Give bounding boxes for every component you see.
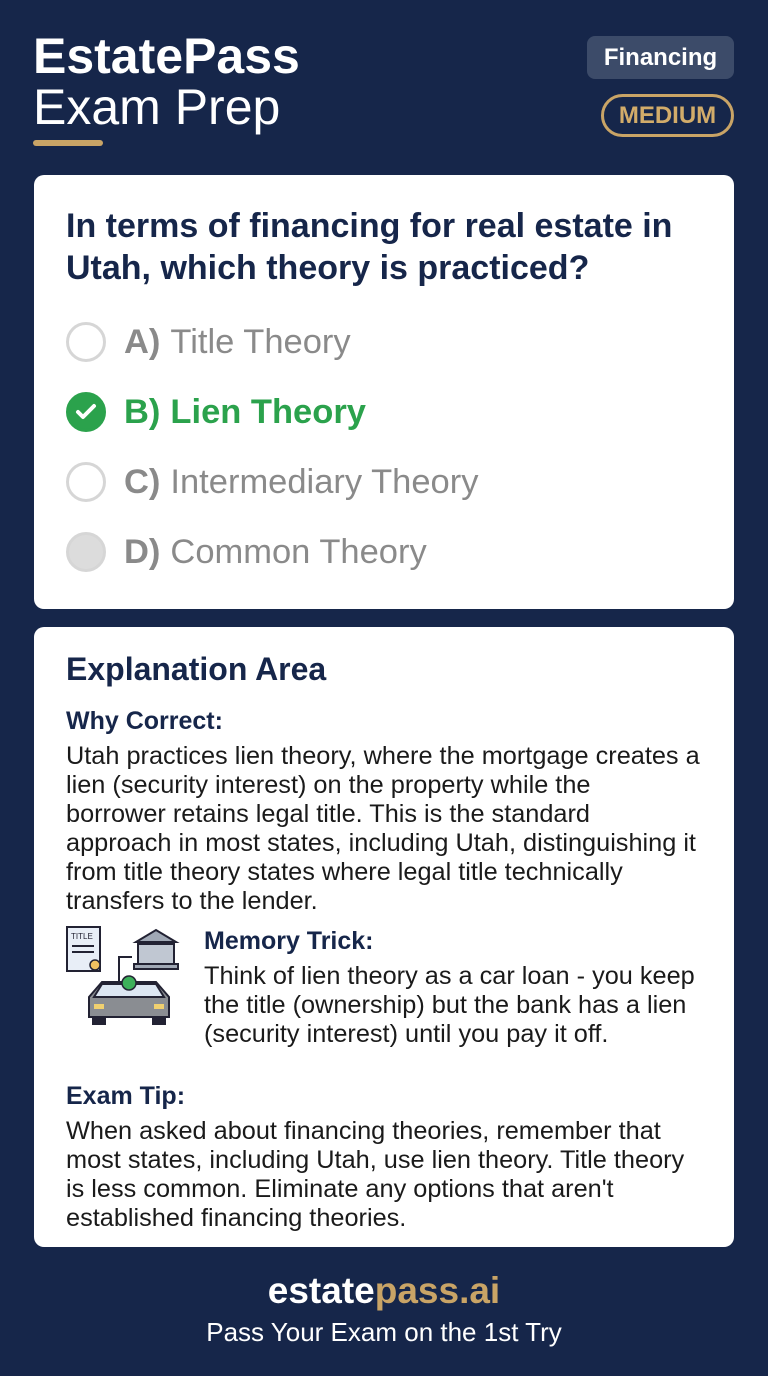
why correct: transfers to the lender. — [66, 887, 318, 915]
title — [33, 28, 300, 146]
question text: In terms of financing for real estate in Utah, which theory is practiced? — [66, 207, 672, 287]
option C: Intermediary Theory — [170, 462, 478, 500]
option B correct — [66, 392, 366, 432]
option C: C) — [124, 462, 160, 500]
why correct: Utah practices lien theory, where the mortgage creates a — [66, 742, 700, 770]
why correct: borrower retains legal title. This is the standard — [66, 800, 590, 828]
exam tip — [66, 1082, 684, 1232]
memory trick: the title (ownership) but the bank has a lien — [204, 991, 686, 1019]
category badge: Financing — [604, 44, 717, 71]
why correct: Why Correct: — [66, 707, 223, 735]
why correct: approach in most states, including Utah, distinguishing it — [66, 829, 696, 857]
option A: Title Theory — [170, 322, 351, 360]
exam tip: When asked about financing theories, remember that — [66, 1117, 661, 1145]
option A: A) — [124, 322, 160, 360]
title: EstatePass — [33, 28, 300, 84]
why correct: lien (security interest) on the property while the — [66, 771, 590, 799]
option D: Common Theory — [170, 532, 427, 570]
option A — [66, 322, 351, 362]
panel: question — [34, 175, 734, 609]
option D — [66, 532, 427, 572]
exam tip: Exam Tip: — [66, 1082, 185, 1110]
memory trick: Memory Trick: — [204, 927, 374, 955]
memory trick — [204, 927, 695, 1048]
panel: explanation — [34, 627, 734, 1247]
memory trick: Think of lien theory as a car loan - you keep — [204, 962, 695, 990]
option B correct: B) — [124, 392, 160, 430]
title: Exam Prep — [33, 79, 280, 135]
icon: title, bank, car: TITLE — [71, 932, 93, 941]
category badge — [587, 36, 734, 79]
memory trick: (security interest) until you pay it off. — [204, 1020, 608, 1048]
explanation heading: Explanation Area — [66, 651, 326, 687]
option D: D) — [124, 532, 160, 570]
footer brand: estatepass.ai — [268, 1270, 500, 1311]
exam tip: established financing theories. — [66, 1204, 406, 1232]
difficulty badge: MEDIUM — [619, 102, 716, 129]
why correct: from title theory states where legal title technically — [66, 858, 623, 886]
why correct — [66, 707, 700, 915]
exam tip: is less common. Eliminate any options that aren't — [66, 1175, 614, 1203]
footer tagline: Pass Your Exam on the 1st Try — [206, 1317, 562, 1347]
exam tip: most states, including Utah, use lien theory. Title theory — [66, 1146, 684, 1174]
difficulty badge — [601, 94, 734, 137]
icon: title, bank, car — [66, 926, 180, 1025]
option B correct: Lien Theory — [170, 392, 366, 430]
